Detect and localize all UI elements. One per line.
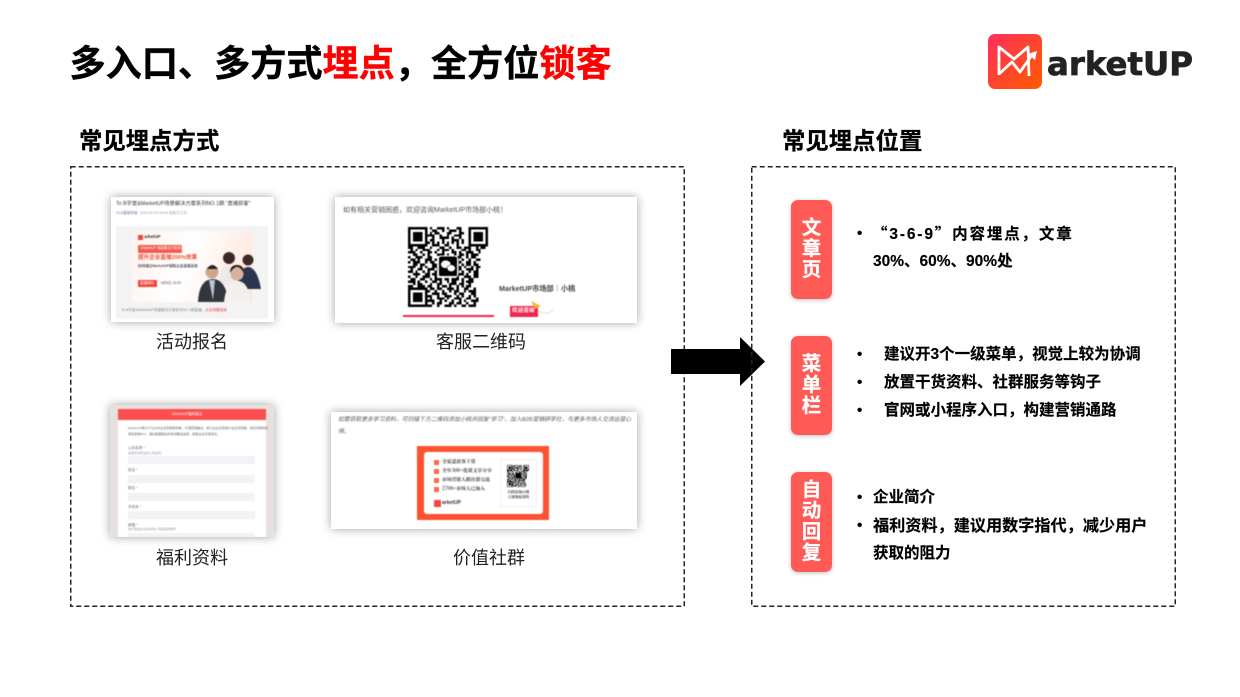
screenshot: welfare materials form: MarketUP福利速达: [172, 412, 202, 416]
screenshot: event signup article: 如何通过MarketUP赋能企业直播高效: [138, 264, 198, 268]
text: auto reply tips: •: [857, 489, 862, 506]
poster: community invitation: 立刻领取资料: [508, 495, 529, 500]
poster: community invitation: [417, 446, 549, 520]
badge: article page: 章: [802, 238, 821, 260]
logo: MarketUP: arketUP: [1047, 45, 1193, 83]
badge: menu bar: [791, 336, 832, 435]
screenshot: event signup article: MarketUP 场景解决方案系列: [141, 246, 184, 250]
text: article page tips: [857, 222, 1074, 270]
screenshot: welfare materials form: 姓名 *: [128, 468, 138, 472]
panel: tracking methods: [70, 166, 685, 607]
badge: auto reply: 动: [802, 500, 821, 522]
poster: community invitation: 全渠道获客干货: [442, 458, 476, 465]
text: menu bar tips: 官网或小程序入口，构建营销通路: [884, 402, 1117, 419]
screenshot: event signup article: To B营销学堂 2023-05-09 18:49 发表于江苏: [116, 211, 187, 215]
text: auto reply tips: 企业简介: [873, 489, 935, 506]
badge: menu bar: 单: [802, 374, 821, 396]
screenshot: event signup article: To B字堂&MarketUP场景解决方案系列NO.1期直播，点击观看回放: [121, 308, 227, 312]
text: menu bar tips: •: [857, 402, 862, 419]
screenshot: welfare materials form: 率和营销ROI，通过数据驱动市场决策和运营，赋能企业高速增长。: [128, 432, 220, 436]
text: article page tips: •: [857, 225, 862, 242]
screenshot: event signup article: 提升企业直播200%效果: [138, 255, 197, 261]
text: menu bar tips: [857, 346, 1141, 419]
screenshot: welfare materials form: 职位 *: [128, 486, 138, 490]
caption: value community: 价值社群: [453, 548, 525, 568]
badge: auto reply: 自: [802, 479, 821, 501]
caption: customer service QR code: 客服二维码: [436, 332, 526, 352]
poster: community invitation: 全年300+优质文章分享: [442, 467, 492, 474]
text: article page tips: “3-6-9”内容埋点，文章: [872, 222, 1074, 244]
caption: event signup: 活动报名: [156, 332, 228, 352]
text: menu bar tips: •: [857, 374, 862, 391]
title: 多入口、多方式埋点，全方位锁客: [70, 43, 612, 84]
badge: article page: 文: [802, 217, 821, 239]
screenshot: value community: 如需获取更多学习资料，可扫描下方二维码添加小桃并回复“学习”，加入B2B营销研学社，与更多市场人交流运营心: [338, 417, 631, 423]
screenshot: event signup article: To B字堂&MarketUP场景解决方案系列NO.1期 “直播获客”: [116, 201, 250, 207]
poster: community invitation: 扫码添加小桃: [508, 490, 529, 495]
badge: auto reply: [791, 472, 832, 572]
badge: auto reply: 回: [802, 521, 821, 543]
text: auto reply tips: [857, 488, 1147, 562]
badge: menu bar: 菜: [802, 353, 821, 375]
text: auto reply tips: 福利资料，建议用数字指代，减少用户: [873, 517, 1147, 535]
logo: MarketUP: [988, 34, 1193, 89]
screenshot: value community: 得。: [338, 429, 350, 435]
icon: QR code: [407, 226, 489, 308]
poster: community invitation: 市场营销人精社群交流: [442, 476, 490, 483]
screenshot: event signup article: [111, 197, 274, 322]
screenshot: event signup article: 5月9日 19:00: [161, 281, 181, 285]
screenshot: welfare materials form: MarketUP致力于让B2B企业营销更简单，打通营销触点，助力企业实现客户全生命周期，提高线索转化: [128, 426, 268, 430]
screenshot: customer service QR code: 欢迎咨询: [512, 308, 534, 314]
poster: community invitation: 2700+市场人已加入: [442, 485, 485, 492]
caption: welfare materials: 福利资料: [156, 548, 228, 568]
screenshot: value community: [331, 412, 637, 529]
screenshot: customer service QR code: 如有相关营销困惑，欢迎咨询MarketUP市场部小桃！: [343, 207, 507, 214]
screenshot: welfare materials form: 公司名称 *: [128, 446, 145, 450]
panel: tracking positions: [751, 166, 1176, 607]
text: auto reply tips: 获取的阻力: [873, 545, 951, 562]
screenshot: welfare materials form: 用于发送企业资料和公司权益的邮件: [128, 527, 176, 531]
screenshot: welfare materials form: 请填写您所在的公司全称: [128, 451, 161, 455]
text: auto reply tips: •: [857, 517, 862, 534]
poster: community invitation: arketUP: [442, 500, 461, 506]
screenshot: event signup article: 直播预约: [140, 281, 154, 285]
screenshot: welfare materials form: 手机号 *: [128, 505, 141, 509]
screenshot: customer service QR code: [335, 197, 637, 323]
text: article page tips: 30%、60%、90%处: [873, 253, 1013, 270]
heading: common tracking methods: 常见埋点方式: [79, 128, 219, 154]
heading: common tracking positions: 常见埋点位置: [782, 128, 922, 154]
arrow: [671, 337, 765, 386]
screenshot: welfare materials form: 邮箱 *: [128, 523, 138, 527]
screenshot: welfare materials form: [110, 405, 274, 537]
text: menu bar tips: 放置干货资料、社群服务等钩子: [884, 374, 1101, 391]
text: menu bar tips: 建议开3个一级菜单，视觉上较为协调: [884, 346, 1141, 363]
illustration: speakers: [197, 251, 262, 303]
badge: auto reply: 复: [802, 542, 821, 564]
text: menu bar tips: •: [857, 346, 862, 363]
badge: menu bar: 栏: [802, 395, 821, 417]
screenshot: customer service QR code: MarketUP市场部｜小桃: [499, 284, 575, 293]
badge: article page: [791, 200, 832, 299]
badge: article page: 页: [802, 259, 821, 281]
screenshot: event signup article: arketUP: [144, 234, 161, 239]
